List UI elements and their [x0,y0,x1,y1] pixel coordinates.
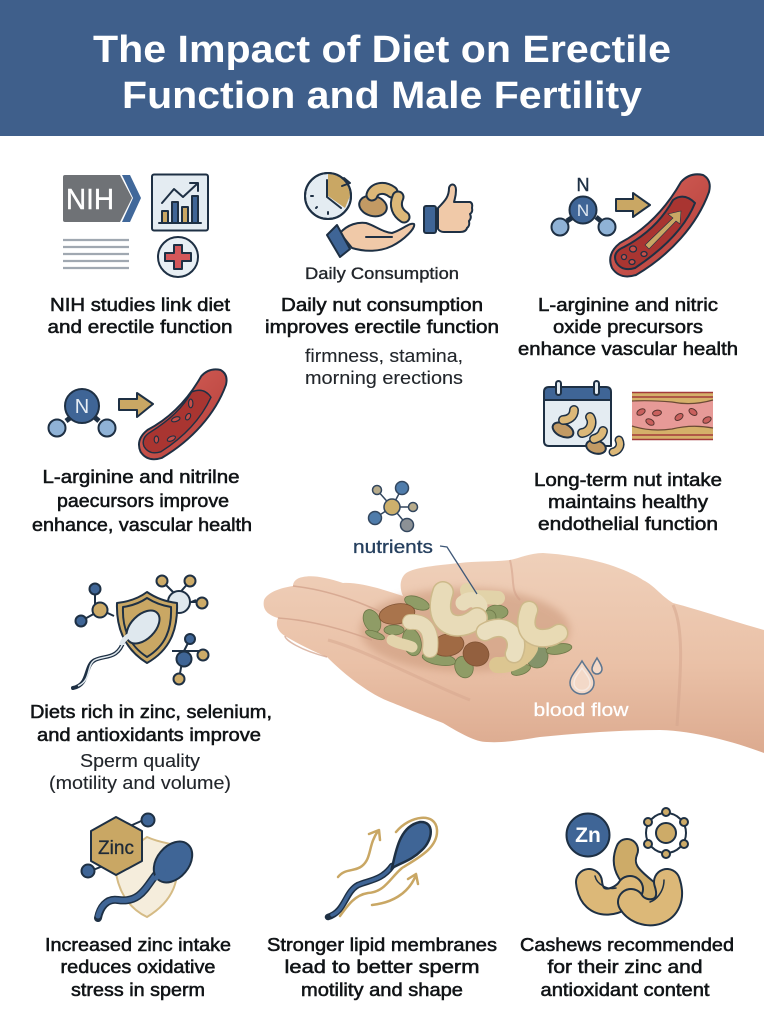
icon: text lines [63,240,129,268]
panel: zinc reduces oxidative stress [45,814,231,1000]
text: zinc, selenium, antioxidants: (motility and volume) [49,773,231,793]
icon: nitrogen molecule: N [576,175,590,195]
icon: pale shield [115,837,178,917]
text: daily nut consumption: Daily nut consumption [281,294,483,315]
panel: zinc, selenium, antioxidants [30,576,272,793]
icon: nitrogen molecule: N [577,201,589,220]
text: NIH studies: and erectile function [48,316,232,337]
text: L-arginine and nitric oxide: oxide precursors [553,316,703,337]
icon: nitrogen molecule [48,389,116,436]
icon: thumbs up [424,184,472,233]
text: NIH studies [48,294,232,337]
icon: Zn badge [566,814,610,856]
icon: arrow [119,393,153,417]
icon: NIH logo: NIH [66,184,114,216]
icon: growth chart [152,174,208,230]
text: cashews [520,934,734,1000]
illustration: hand holding nuts [264,537,764,753]
text: L-arginine and nitric oxide [518,294,738,359]
text: long-term nut intake [534,469,722,534]
title banner: Function and Male Fertility [122,75,642,117]
icon: shield [117,592,177,663]
pumpkin seeds [360,593,573,680]
text: daily nut consumption: firmness, stamina, [305,346,463,366]
icon: nitrogen molecule [552,175,616,236]
icon: blue sperm [98,834,200,918]
icon: blood vessel [139,369,227,459]
text: zinc reduces oxidative stress: Increased zinc intake [45,934,231,955]
label: daily consumption: Daily Consumption [305,265,459,283]
icon: cashews [589,850,669,912]
icon: gold membrane outline [340,818,437,916]
icon: blood drops [570,658,602,694]
hand [264,553,764,753]
text: long-term nut intake: Long-term nut intake [534,469,722,490]
icon: nitrogen molecule: N [75,396,89,418]
icon: Zn badge: Zn [575,824,601,847]
icon: calendar with nuts [544,381,620,456]
icon: blood vessel [610,174,710,276]
palm shading [278,560,681,726]
leader line: nutrients [440,546,477,594]
label: nutrients: nutrients [353,537,433,557]
text: zinc, selenium, antioxidants: Diets rich in zinc, selenium, [30,701,272,722]
icon: nutrients network [368,482,418,532]
text: L-arginine and nitrilne [32,466,252,535]
title banner [0,0,764,136]
text: daily nut consumption [265,294,499,388]
text: NIH studies: NIH studies link diet [50,294,230,315]
text: zinc, selenium, antioxidants [30,701,272,793]
text: stronger lipid membranes: motility and shape [301,979,463,1000]
text: zinc, selenium, antioxidants: and antioxidants improve [37,724,261,745]
icon: artery cross-section [632,392,713,440]
panel: L-arginine and nitric oxide [518,174,738,359]
panel: NIH studies [48,174,232,337]
icon: open hand [327,223,414,257]
text: cashews: for their zinc and [548,956,702,977]
text: long-term nut intake: endothelial function [538,513,718,534]
icon: medical cross [158,237,198,277]
panel: L-arginine and nitrilne precursors [32,369,252,535]
text: daily nut consumption: improves erectile function [265,316,499,337]
nut pile [360,590,573,680]
text: stronger lipid membranes [267,934,497,1000]
text: zinc reduces oxidative stress [45,934,231,1000]
text: L-arginine and nitrilne: paecursors improve [57,490,229,511]
panel: stronger lipid membranes [267,818,497,1000]
icon: nuts above hand [357,188,404,219]
icon: antioxidant ring [644,808,688,858]
text: cashews: Cashews recommended [520,934,734,955]
icon: clock [305,173,351,219]
icon: motion arrows [338,830,418,905]
text: zinc reduces oxidative stress: reduces oxidative [60,956,216,977]
text: L-arginine and nitrilne: enhance, vascular health [32,514,252,535]
text: L-arginine and nitric oxide: enhance vascular health [518,338,738,359]
icon: antioxidant molecules [76,576,208,684]
text: cashews: antioxidant content [540,979,710,1000]
almonds [378,601,492,670]
icon: zinc hexagon: Zinc [98,838,134,859]
icon: arrow [616,193,650,217]
text: stronger lipid membranes: Stronger lipid membranes [267,934,497,955]
panel: long-term nut intake [534,381,722,534]
text: long-term nut intake: maintains healthy [548,491,709,512]
panel: cashews [520,808,734,1000]
icon: zinc hexagon [82,814,154,878]
cashews [392,590,559,665]
panel: daily nut consumption [265,173,499,388]
icon: NIH logo [63,175,141,222]
text: daily nut consumption: morning erections [305,368,463,388]
text: L-arginine and nitric oxide: L-arginine and nitric [538,294,718,315]
label: blood flow: blood flow [534,700,630,720]
text: stronger lipid membranes: lead to better sperm [284,956,480,977]
text: zinc, selenium, antioxidants: Sperm quality [80,751,200,771]
icon: blue sperm streamlined [328,822,431,917]
text: L-arginine and nitrilne: L-arginine and nitrilne [42,466,240,487]
text: zinc reduces oxidative stress: stress in sperm [71,979,205,1000]
title banner: The Impact of Diet on Erectile [93,29,671,71]
icon: sperm with tail [73,604,166,688]
